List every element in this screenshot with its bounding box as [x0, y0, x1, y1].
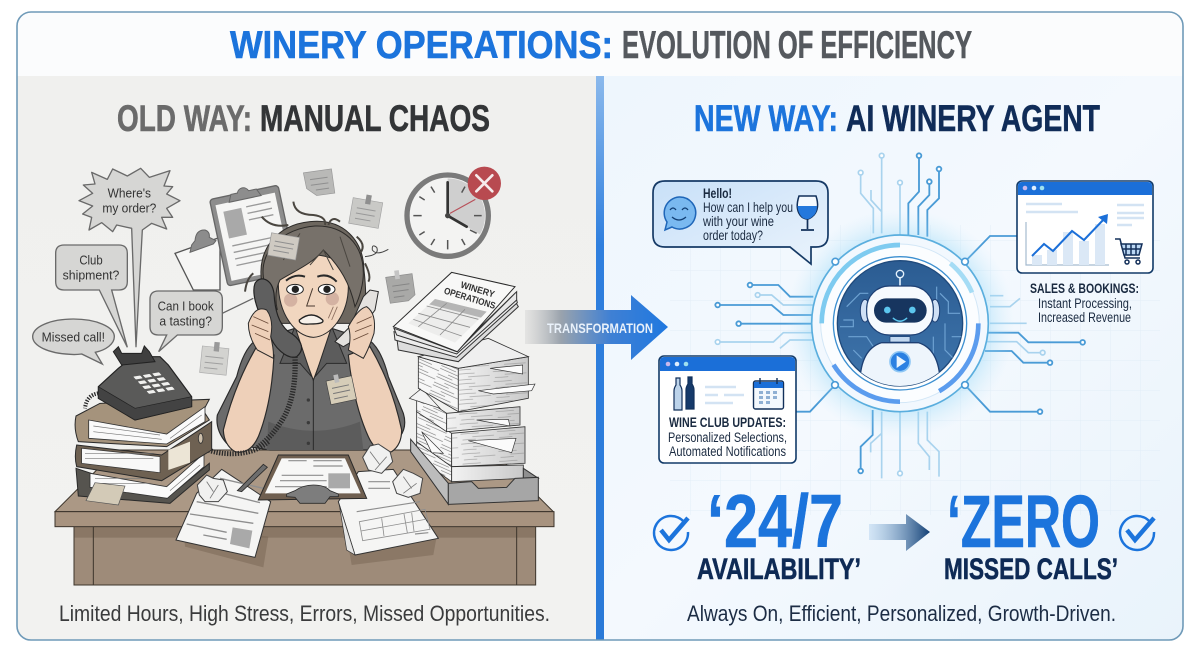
- panel: new way background: [604, 76, 1183, 640]
- circuit lines bright: [715, 153, 1085, 473]
- clock hands: [448, 182, 467, 227]
- heading: old way: MANUAL CHAOS: [260, 98, 490, 139]
- cord on desk: [207, 442, 268, 454]
- play button: [890, 352, 910, 372]
- line from bubble to handset: [222, 298, 253, 313]
- name sticky: [325, 372, 356, 405]
- illustration: desk items: [75, 338, 538, 557]
- shirt: [217, 328, 405, 450]
- binder stack: [75, 399, 212, 505]
- bubble: club shipment: Club: [79, 253, 103, 268]
- panel: sales and bookings window: [1017, 181, 1153, 273]
- coiled cord: [257, 357, 295, 448]
- chat text: with your wine: [702, 213, 774, 229]
- chat text: How can I help you: [703, 199, 793, 215]
- loose sheet behind clipboard: [175, 237, 220, 290]
- illustration: winery operations report on top of paper stack: [393, 272, 518, 362]
- robot face: [874, 298, 927, 323]
- bubble: missed call: [33, 319, 114, 364]
- heading: new way: NEW WAY:: [694, 98, 838, 139]
- bubble: club shipment: [56, 245, 127, 347]
- crumpled paper balls: [197, 444, 423, 502]
- sticky note lower left: [200, 341, 229, 375]
- clipboard: [209, 181, 296, 286]
- forearm right: [348, 347, 402, 452]
- technical grid behind the agent: [670, 225, 1160, 515]
- sticky note right: [349, 192, 384, 228]
- heading: old way: OLD WAY:: [117, 98, 252, 139]
- stack block lower: [417, 412, 525, 482]
- text: wine club updates: Automated Notifications: [669, 444, 786, 459]
- illustration: worker at desk: [55, 450, 554, 585]
- icon: shopping cart: [1115, 239, 1142, 264]
- bubble: where's my order: [79, 168, 180, 347]
- sales chart: [1026, 214, 1109, 265]
- bubble: where's my order: Where's: [108, 185, 151, 200]
- desk: [55, 450, 554, 585]
- icon: smiley chat: [664, 197, 696, 230]
- caption: new way: Always On, Efficient, Personalized, Growth-Driven.: [687, 601, 1116, 626]
- title: [230, 24, 972, 67]
- sticky on hair: [268, 233, 299, 260]
- illustration: background clipboard and sticky notes: [175, 169, 416, 375]
- chat text: Hello!: [703, 185, 732, 201]
- eyes and brows: [287, 284, 303, 294]
- panel: wine club updates window: [659, 356, 796, 463]
- arrow: between stats: [869, 514, 930, 551]
- circuit lines faint: [715, 153, 1045, 478]
- icon: check left: [654, 516, 688, 550]
- icon: desk telephone: [85, 346, 192, 420]
- handset left: [254, 279, 302, 357]
- document left: [176, 469, 271, 557]
- robot body: [860, 337, 940, 390]
- handset right: [335, 290, 378, 347]
- keypad: [133, 372, 175, 394]
- text: sales and bookings: SALES & BOOKINGS:: [1030, 280, 1139, 296]
- stat: 24/7 availability: [654, 479, 861, 586]
- AI agent hub and circuits: [715, 153, 1085, 478]
- hand right: [348, 307, 375, 358]
- text: sales and bookings: Increased Revenue: [1038, 310, 1131, 325]
- title: WINERY OPERATIONS:: [230, 24, 613, 67]
- hub rings: [790, 213, 1010, 434]
- text: sales and bookings: [1030, 280, 1139, 325]
- stat: zero missed calls: ‘ZERO: [947, 480, 1100, 563]
- hub connection nodes: [832, 258, 968, 388]
- caption: old way: Limited Hours, High Stress, Errors, Missed Opportunities.: [59, 601, 550, 626]
- red cross badge: [468, 167, 501, 200]
- bubble: book a tasting: a tasting?: [159, 313, 212, 328]
- middle binder: [75, 422, 212, 481]
- stack block top: [418, 338, 535, 412]
- central divider: [596, 76, 604, 640]
- bubble: club shipment: shipment?: [63, 267, 119, 282]
- robot disc: [837, 261, 963, 390]
- report title: WINERY: [459, 280, 497, 300]
- robot head: [867, 286, 933, 335]
- pen: [237, 464, 267, 492]
- squiggle: [365, 246, 388, 257]
- report title: OPERATIONS: [443, 286, 497, 311]
- top binder: [75, 399, 209, 447]
- report title: [443, 280, 497, 311]
- hair front: [263, 226, 363, 310]
- icon: calendar: [754, 378, 784, 409]
- chat bubble: hello: [653, 181, 828, 264]
- title: EVOLUTION OF EFFICIENCY: [622, 24, 972, 67]
- arrow: transformation: TRANSFORMATION: [547, 320, 653, 336]
- heading: new way: [694, 98, 1100, 139]
- heading: old way: [117, 98, 490, 139]
- panel: old way background: [17, 76, 596, 640]
- paper stack: [409, 338, 535, 482]
- bubble: book a tasting: Can I book: [158, 299, 214, 314]
- clipboard on desk: [258, 455, 367, 503]
- illustration: person overwhelmed: [217, 202, 405, 452]
- icon: check right: [1120, 516, 1154, 550]
- illustration: speech bubbles of customer demands: [33, 168, 253, 364]
- arrow: transformation: [525, 295, 668, 360]
- text: sales and bookings: Instant Processing,: [1038, 296, 1132, 311]
- robot antenna: [897, 278, 902, 286]
- icon: wine bottles: [674, 377, 694, 410]
- hand left: [248, 309, 273, 358]
- face: [278, 255, 348, 337]
- robot ears: [860, 299, 870, 322]
- icon: wall clock with red cross: [407, 167, 501, 256]
- heading: new way: AI WINERY AGENT: [846, 98, 1100, 139]
- grimacing mouth: [299, 315, 323, 324]
- bubble: missed call: Missed call!: [42, 329, 105, 344]
- text: wine club updates: [668, 414, 787, 459]
- bubble: where's my order: my order?: [102, 201, 156, 216]
- document right: [338, 469, 438, 555]
- sticky on binder: [86, 483, 125, 505]
- stat: 24/7 availability: ‘24/7: [707, 479, 843, 563]
- stat: zero missed calls: MISSED CALLS’: [944, 553, 1118, 586]
- neck: [295, 323, 332, 380]
- text: wine club updates: Personalized Selections,: [668, 430, 787, 445]
- stack block bottom: [417, 442, 452, 482]
- sticky note top: [303, 169, 335, 197]
- document tray: [411, 439, 538, 504]
- text: wine club updates: WINE CLUB UPDATES:: [669, 414, 786, 430]
- bottom binder: [76, 453, 209, 503]
- hair back: [261, 221, 366, 323]
- chat text: order today?: [703, 227, 763, 243]
- clip of loose sheet: [190, 230, 216, 252]
- forearm left: [223, 347, 274, 452]
- sticky note middle: [385, 268, 416, 303]
- bubble: book a tasting: [150, 291, 222, 352]
- icon: wine glass: [797, 196, 818, 230]
- stack block middle: [409, 388, 520, 432]
- collar: [280, 327, 347, 377]
- chat text: [702, 185, 793, 243]
- stat: 24/7 availability: AVAILABILITY’: [697, 553, 861, 586]
- glow: [785, 208, 1015, 438]
